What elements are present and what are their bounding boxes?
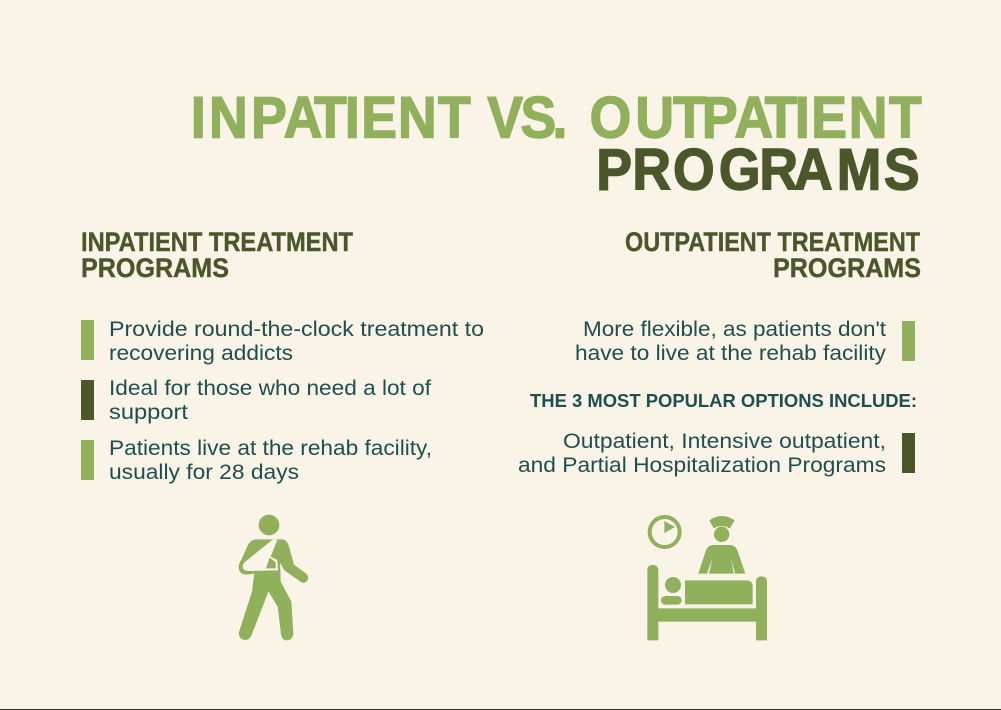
- bullet: round-the-clock treatment: [81, 318, 484, 365]
- bullet: live at the rehab facility: Patients live at the rehab facility,: [109, 437, 432, 460]
- icon: clock: [650, 517, 680, 547]
- bullet: round-the-clock treatment: recovering addicts: [109, 342, 293, 365]
- title: PROGRAMS: [596, 136, 920, 202]
- bullet: more flexible: More flexible, as patients don't: [583, 318, 886, 341]
- bullet: outpatient options: Outpatient, Intensive outpatient,: [563, 430, 886, 453]
- heading: outpatient treatment programs: OUTPATIENT TREATMENT: [625, 227, 920, 257]
- bullet: more flexible: have to live at the rehab facility: [575, 342, 887, 365]
- bullet: ideal for those who need support: [81, 377, 431, 424]
- bullet: live at the rehab facility: [81, 437, 432, 484]
- bullet: ideal for those who need support: Ideal for those who need a lot of: [109, 377, 431, 400]
- title: INPATIENT VS. OUTPATIENT: [191, 84, 922, 150]
- heading: inpatient treatment programs: PROGRAMS: [81, 253, 229, 283]
- panel: inpatient programs: [81, 227, 484, 640]
- icon: nurse: [698, 516, 745, 574]
- bullet: ideal for those who need support: support: [109, 401, 188, 424]
- heading: outpatient treatment programs: PROGRAMS: [773, 253, 921, 283]
- heading: inpatient treatment programs: [81, 227, 353, 283]
- bullet: live at the rehab facility: usually for 28 days: [109, 461, 299, 484]
- title: [191, 84, 922, 202]
- panel: outpatient programs: [518, 227, 921, 640]
- subheading: three popular options: THE 3 MOST POPULAR OPTIONS INCLUDE:: [530, 391, 917, 411]
- bullet: outpatient options: and Partial Hospitalization Programs: [518, 454, 886, 477]
- icon: walking patient with arm sling: [239, 515, 308, 640]
- icon: nurse, patient in bed and clock: [647, 516, 767, 640]
- heading: outpatient treatment programs: [625, 227, 921, 283]
- icon: bed with patient: [647, 565, 767, 640]
- bullet: round-the-clock treatment: Provide round-the-clock treatment to: [109, 318, 484, 341]
- heading: inpatient treatment programs: INPATIENT TREATMENT: [81, 227, 353, 257]
- bullet: more flexible: [575, 318, 915, 365]
- bullet: outpatient options: [518, 430, 915, 477]
